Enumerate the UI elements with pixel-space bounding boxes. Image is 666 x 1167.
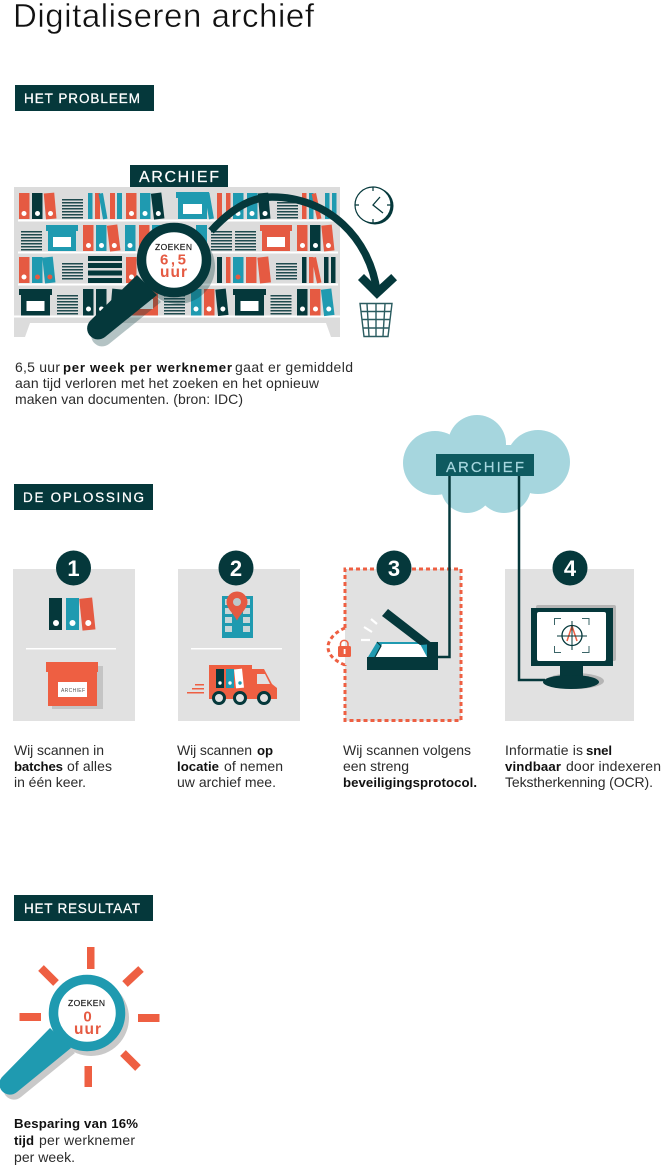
text: problem description: per week per werknemer xyxy=(63,360,232,375)
icon: delivery truck xyxy=(187,665,277,704)
text: result: Besparing van 16% xyxy=(14,1116,138,1131)
number badge 4 xyxy=(552,550,588,586)
text: step 1: batches xyxy=(14,759,63,774)
text: step 2: op xyxy=(257,743,273,758)
text: step 1 xyxy=(14,742,112,790)
icon: cloud archive: ARCHIEF xyxy=(446,459,524,476)
icon: magnifier with 0 uur and rays xyxy=(0,947,159,1100)
number badge 3: 3 xyxy=(388,556,400,581)
number badge 2: 2 xyxy=(230,556,242,581)
illustration: archive bookshelf with magnifier xyxy=(14,165,394,346)
heading: het resultaat xyxy=(14,895,153,921)
icon: magnifier with 6,5 uur: 6,5 xyxy=(160,252,186,268)
label: archief: ARCHIEF xyxy=(139,169,219,186)
text: step 2: uw archief mee. xyxy=(177,774,276,790)
text: result: per werknemer xyxy=(39,1132,135,1148)
text: step 2: of nemen xyxy=(224,758,283,774)
text: step 3: beveiligingsprotocol. xyxy=(343,775,477,790)
text: step 4: Tekstherkenning (OCR). xyxy=(505,774,653,790)
icon: computer monitor with OCR target xyxy=(531,605,616,689)
number badge 3 xyxy=(376,550,412,586)
icon: archive box xyxy=(46,662,103,709)
heading: de oplossing: DE OPLOSSING xyxy=(23,490,144,505)
text: step 1: Wij scannen in xyxy=(14,742,104,758)
text: result xyxy=(14,1116,138,1165)
icon: magnifier with 0 uur and rays: ZOEKEN xyxy=(68,998,105,1008)
text: step 4: door indexeren xyxy=(566,758,661,774)
panel: step 2 xyxy=(178,569,300,721)
text: step 1: in één keer. xyxy=(14,774,86,790)
panel: step 4 xyxy=(505,569,634,721)
shelf row 4 xyxy=(19,289,335,316)
heading: het resultaat: HET RESULTAAT xyxy=(24,901,140,916)
text: step 4: Informatie is xyxy=(505,742,583,758)
shelf row 3 xyxy=(19,256,336,284)
label: archief xyxy=(130,165,228,187)
icon: magnifier with 0 uur and rays: 0 xyxy=(83,1008,92,1026)
icon: magnifier with 6,5 uur xyxy=(87,228,215,346)
icon: cloud archive xyxy=(403,415,570,513)
text: step 3: Wij scannen volgens xyxy=(343,742,471,758)
icon: clock xyxy=(355,187,394,224)
text: problem description xyxy=(15,359,353,407)
text: problem description: aan tijd verloren met het zoeken en het opnieuw xyxy=(15,375,320,391)
connector: scanner to cloud xyxy=(437,476,450,657)
shelf row 1 xyxy=(19,192,336,220)
number badge 1 xyxy=(56,550,91,586)
text: result: tijd xyxy=(14,1133,34,1148)
panel: step 3 xyxy=(328,569,461,721)
text: step 2: Wij scannen xyxy=(177,742,252,758)
text: step 4: vindbaar xyxy=(505,759,561,774)
shelf xyxy=(14,187,340,337)
icon: scanner xyxy=(361,609,438,670)
text: problem description: gaat er gemiddeld xyxy=(235,359,353,375)
number badge 2 xyxy=(218,550,254,586)
icon: binders xyxy=(49,597,95,631)
icon: building with location pin xyxy=(222,592,253,638)
text: problem description: maken van documenten. (bron: IDC) xyxy=(15,391,243,407)
number badge 1: 1 xyxy=(67,556,80,581)
text: step 4 xyxy=(505,742,661,790)
arrow: lost time to wastebasket xyxy=(211,197,391,293)
shelf row 2 xyxy=(32,225,334,252)
text: problem description: 6,5 uur xyxy=(15,359,60,375)
icon: archive box: ARCHIEF xyxy=(61,688,85,694)
icon: wastebasket xyxy=(360,304,392,336)
heading: het probleem: HET PROBLEEM xyxy=(24,91,140,106)
icon: magnifier with 6,5 uur: ZOEKEN xyxy=(155,242,192,252)
icon: magnifier with 0 uur and rays: uur xyxy=(74,1021,101,1038)
number badge 4: 4 xyxy=(564,556,577,581)
text: step 3: een streng xyxy=(343,758,409,774)
icon: padlock xyxy=(338,640,351,657)
text: result: per week. xyxy=(14,1149,75,1165)
text: step 2: locatie xyxy=(177,759,219,774)
connector: monitor to cloud xyxy=(519,476,545,680)
icon: magnifier with 6,5 uur: uur xyxy=(160,264,187,281)
text: step 2 xyxy=(177,742,283,790)
panel: step 1 xyxy=(13,569,135,721)
text: step 4: snel xyxy=(586,743,612,758)
heading: het probleem xyxy=(15,85,154,111)
heading: de oplossing xyxy=(14,484,153,510)
text: step 1: of alles xyxy=(67,758,112,774)
text: step 3 xyxy=(343,742,477,790)
